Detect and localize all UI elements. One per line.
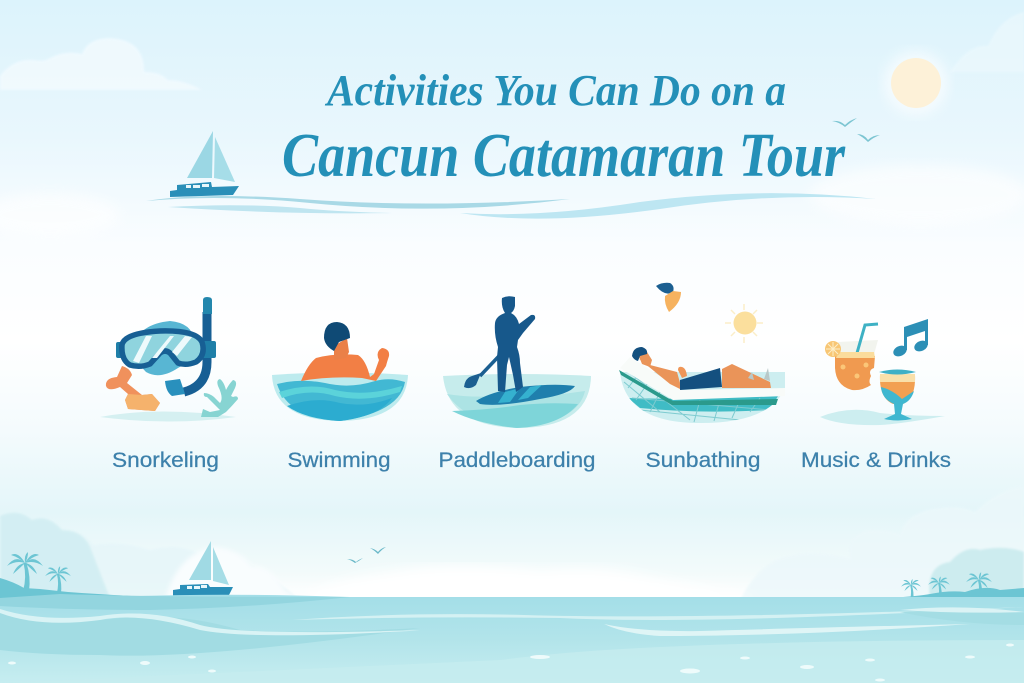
person	[638, 358, 682, 390]
mid haze clouds	[0, 165, 1024, 237]
label: snorkeling: Snorkeling	[112, 449, 219, 472]
icon: sunbather	[619, 283, 785, 424]
sailboat top	[170, 131, 239, 197]
birds near title	[832, 118, 880, 142]
icon: snorkel mask	[100, 297, 238, 422]
board	[476, 385, 575, 405]
mask frame	[122, 331, 203, 366]
person	[495, 296, 535, 392]
icon: swimmer	[272, 322, 408, 421]
paddle	[480, 356, 499, 376]
cloud top right	[950, 12, 1024, 72]
snorkel	[184, 312, 207, 392]
left island with palms	[0, 552, 170, 606]
sand	[820, 410, 945, 425]
birds lower	[347, 547, 386, 563]
glass top	[838, 340, 878, 358]
flying head ornament	[656, 283, 674, 294]
head	[324, 322, 350, 351]
body	[301, 348, 389, 381]
straw	[857, 324, 878, 353]
coral teal	[201, 379, 238, 417]
bottom white glow	[300, 565, 760, 600]
bottom right clouds	[740, 486, 1024, 600]
music note	[892, 319, 929, 358]
title	[282, 66, 846, 190]
goblet	[880, 375, 915, 404]
bottom left clouds	[0, 513, 300, 600]
water	[443, 374, 591, 428]
title: Activities You Can Do on a	[324, 66, 786, 115]
sea	[0, 594, 1024, 683]
cloud top left	[0, 38, 202, 90]
sand	[100, 412, 236, 422]
coral orange	[106, 366, 160, 411]
sun	[725, 304, 763, 343]
title: Cancun Catamaran Tour	[282, 122, 846, 190]
label: music and drinks: Music & Drinks	[801, 449, 951, 472]
citrus	[825, 341, 841, 357]
sun	[884, 51, 948, 115]
left sailboat	[173, 541, 233, 597]
bowl of water	[272, 372, 408, 421]
pool	[620, 372, 785, 424]
label: sunbathing: Sunbathing	[646, 449, 760, 472]
right island with palms	[889, 572, 1024, 612]
icon: paddleboarder	[443, 296, 591, 428]
label: paddleboarding: Paddleboarding	[438, 449, 596, 472]
icon: music and drinks	[820, 319, 945, 425]
strap	[116, 342, 126, 358]
cocktail	[835, 356, 875, 390]
lounger	[619, 370, 778, 405]
title swoosh waves	[146, 193, 876, 219]
mask back	[134, 321, 194, 375]
label: swimming: Swimming	[288, 449, 390, 472]
